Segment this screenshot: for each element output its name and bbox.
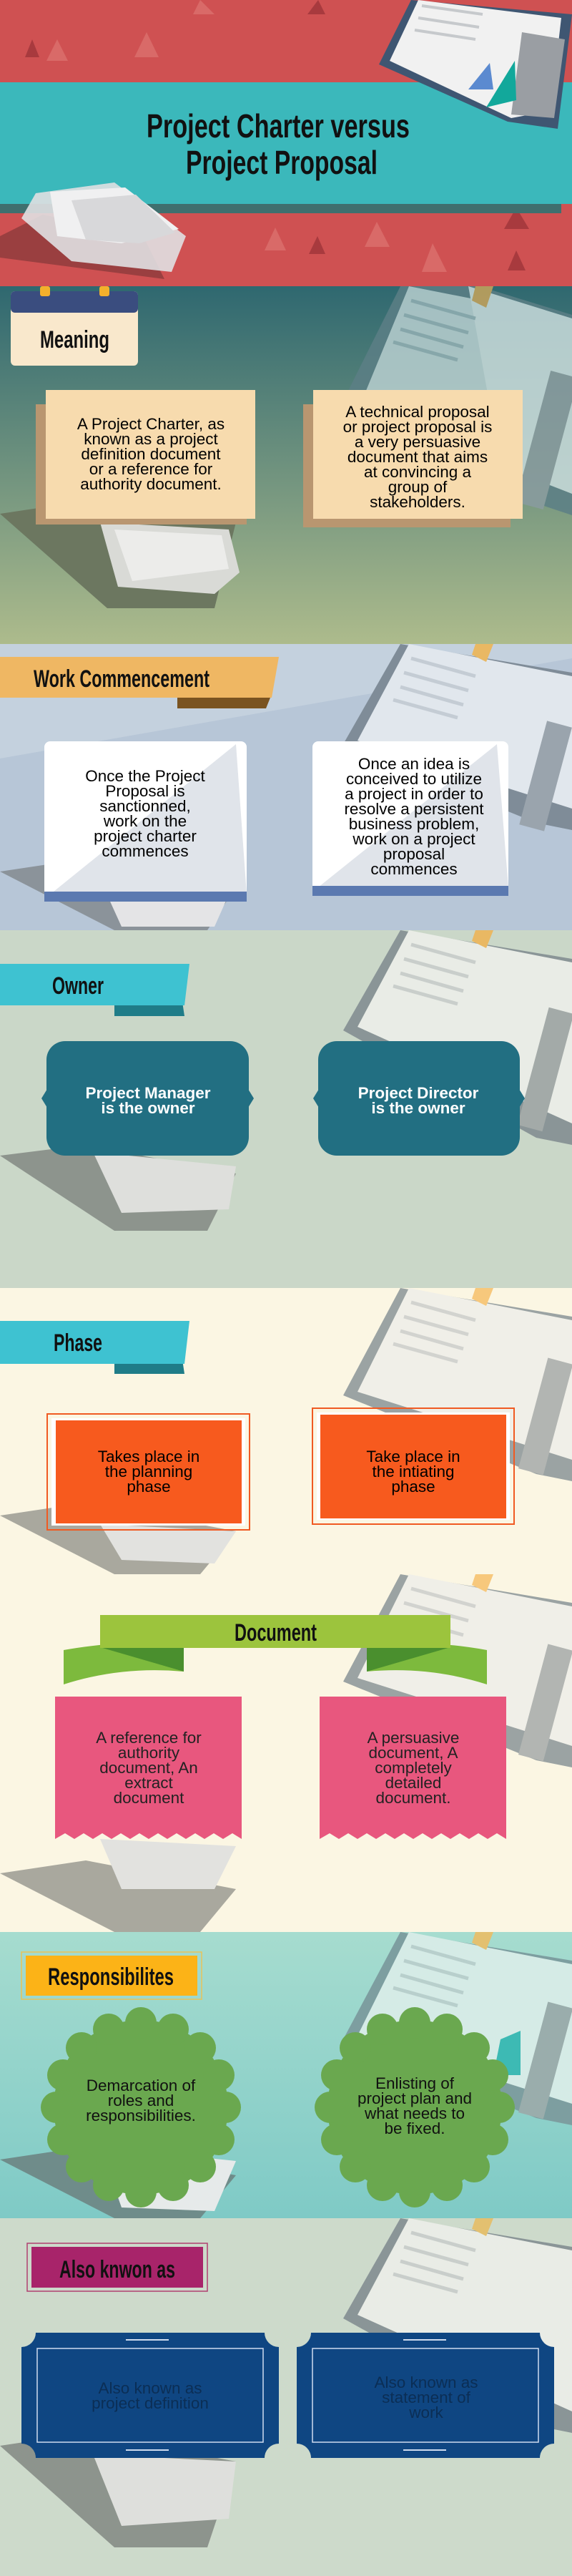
card: meaning proposal: a very persuasive [355,433,480,451]
heading: phase ribbon [0,1321,189,1374]
card: ticket charter: Also known as [98,2379,202,2397]
card: ticket charter [21,2333,279,2458]
card: meaning proposal: A technical proposal [345,403,490,421]
heading: phase ribbon: Phase [54,1330,102,1357]
card: ticket proposal: Also known as [374,2373,478,2391]
card: work proposal: commences [370,860,458,878]
title: Project Proposal [186,144,378,181]
header section [0,0,572,286]
card: document proposal: document. [375,1789,451,1807]
panel: meaning [0,286,572,644]
title [147,107,410,181]
card: work proposal: work on a project [352,830,475,848]
card: meaning charter: authority document. [80,475,222,493]
card: meaning charter: definition document [81,445,221,463]
icon: notebook (also known) [343,2218,572,2433]
icon: notebook (header) [379,0,572,129]
card: work proposal: business problem, [349,815,479,833]
card: document charter [55,1697,242,1839]
card: document proposal: detailed [385,1774,441,1792]
badge: responsibilities charter [41,2007,241,2207]
card: work proposal [312,741,508,896]
icon: papers (responsibilities) [0,2147,236,2218]
card: work charter: sanctionned, [99,797,191,815]
card: owner charter: is the owner [101,1099,195,1117]
card: meaning charter: A Project Charter, as [77,415,225,433]
badge: responsibilities charter: roles and [108,2092,174,2109]
card: owner proposal: Project Director [358,1084,479,1102]
badge: responsibilities charter: responsibilities. [86,2107,196,2124]
card: phase charter [47,1414,250,1530]
card: meaning charter [36,390,255,525]
heading: responsibilities tag: Responsibilites [48,1963,174,1991]
card: meaning proposal: group of [388,478,448,496]
card: phase proposal: the intiating [372,1463,455,1480]
card: meaning charter: known as a project [84,430,219,448]
card: meaning proposal: at convincing a [364,463,472,481]
badge: responsibilities proposal [315,2007,515,2207]
card: owner charter: Project Manager [85,1084,211,1102]
icon: notebook (document) [343,1574,572,1767]
heading: meaning calendar tag: Meaning [40,326,109,353]
heading: also known as tag: Also knwon as [59,2256,175,2283]
card: phase charter: phase [127,1478,171,1496]
card: document charter: A reference for [96,1729,202,1747]
heading: owner ribbon [0,964,189,1016]
card: work charter: Proposal is [105,782,185,800]
card: work charter: work on the [103,812,187,830]
card: work proposal: conceived to utilize [346,770,482,788]
badge: responsibilities proposal: be fixed. [384,2119,445,2137]
icon: papers (work) [0,859,236,930]
card: owner charter [41,1041,254,1156]
icon: papers (header) [0,182,186,279]
card: work proposal: a project in order to [345,785,483,803]
card: phase proposal: phase [391,1478,435,1496]
card: meaning proposal [303,390,523,527]
card: meaning proposal: or project proposal is [343,418,492,436]
heading: document ribbon [64,1615,487,1684]
panel: owner [0,930,572,1288]
heading: also known as tag [27,2243,207,2291]
card: document proposal: A persuasive [368,1729,459,1747]
card: phase proposal: Take place in [366,1448,460,1465]
heading: owner ribbon: Owner [52,972,104,1000]
badge: responsibilities charter: Demarcation of [87,2077,196,2094]
icon: notebook (phase) [343,1288,572,1481]
card: document proposal: completely [375,1759,453,1777]
card: work proposal: proposal [383,845,445,863]
title: Project Charter versus [147,107,410,145]
icon: papers (phase) [0,1503,236,1574]
icon: notebook (responsibilities) [343,1932,572,2125]
card: ticket proposal: work [408,2404,443,2421]
card: meaning charter: or a reference for [89,460,213,478]
card: owner proposal [313,1041,525,1156]
heading: work commencement ribbon [0,657,279,708]
card: document charter: extract [124,1774,174,1792]
panel: also known as [0,2218,572,2576]
card: owner proposal: is the owner [371,1099,465,1117]
icon: papers (meaning) [0,501,240,608]
card: work charter: commences [102,842,189,860]
card: ticket proposal: statement of [382,2389,471,2406]
heading: responsibilities tag [21,1952,202,1999]
card: work charter [44,741,247,902]
icon: notebook (owner) [343,930,572,1145]
card: work charter: Once the Project [85,767,206,785]
panel: work commencement [0,644,572,930]
card: document proposal: document, A [368,1744,458,1762]
card: meaning proposal: document that aims [347,448,488,466]
card: document charter: document [114,1789,184,1807]
card: ticket proposal [297,2333,554,2458]
icon: notebook (meaning) [336,286,572,515]
badge: responsibilities proposal: project plan and [358,2089,472,2107]
heading: document ribbon: Document [235,1619,317,1646]
icon: notebook (work) [343,644,572,831]
card: ticket charter: project definition [92,2394,209,2412]
heading: work commencement ribbon: Work Commencement [34,665,209,693]
card: meaning proposal: stakeholders. [370,493,465,511]
card: document charter: authority [118,1744,180,1762]
card: document proposal [320,1697,506,1839]
icon: papers (also known) [0,2433,236,2547]
icon: papers (document) [0,1839,236,1932]
card: work proposal: Once an idea is [358,755,470,773]
card: work charter: project charter [94,827,197,845]
heading: meaning calendar tag [11,286,138,366]
card: document charter: document, An [99,1759,198,1777]
card: phase proposal [312,1408,514,1524]
panel: phase and document background [0,1288,572,1932]
badge: responsibilities proposal: what needs to [364,2104,465,2122]
icon: papers (owner) [0,1145,236,1231]
card: phase charter: Takes place in [98,1448,199,1465]
card: phase charter: the planning [105,1463,192,1480]
card: work proposal: resolve a persistent [344,800,484,818]
panel: responsibilities [0,1932,572,2218]
badge: responsibilities proposal: Enlisting of [375,2074,455,2092]
